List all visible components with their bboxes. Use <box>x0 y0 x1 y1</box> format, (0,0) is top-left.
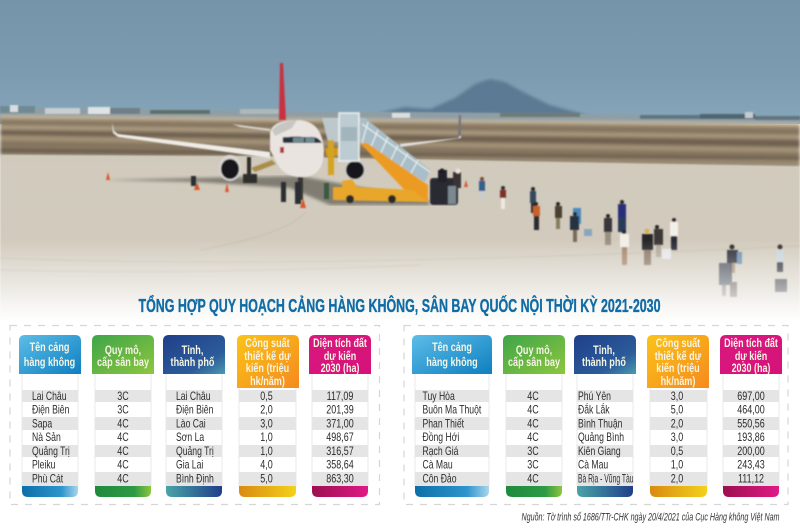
column: province: Tỉnh, <box>182 345 203 357</box>
column: airport name: hàng không <box>426 357 478 369</box>
column: land area: 117,09 <box>327 391 354 403</box>
glass rail <box>360 118 430 182</box>
column: capacity: 5,0 <box>260 474 273 486</box>
ground shadow <box>105 176 430 205</box>
column: capacity: hk/năm) <box>250 376 285 388</box>
distant town <box>0 105 800 122</box>
column: land area: 200,00 <box>737 446 765 458</box>
column: airport name: Pleiku <box>32 460 55 472</box>
column: airport name: Buôn Ma Thuột <box>422 405 481 417</box>
column: scale: 4C <box>117 419 129 431</box>
column: land area: 111,12 <box>738 474 764 486</box>
right engine <box>344 159 366 181</box>
column: land area: 550,56 <box>737 419 765 431</box>
column: airport name: Côn Đảo <box>422 473 457 486</box>
column: capacity: 3,0 <box>260 419 273 431</box>
column: province: Phú Yên <box>578 391 611 403</box>
column: airport name <box>412 335 492 497</box>
column: capacity: 4,0 <box>260 460 273 472</box>
fuselage <box>270 120 324 177</box>
column: land area: 243,43 <box>737 460 765 472</box>
right wing <box>400 135 461 147</box>
column: province: Bình Thuận <box>578 418 622 431</box>
column: capacity: thiết kế dự <box>655 350 702 363</box>
column: land area: Diện tích đất <box>724 337 778 350</box>
column: scale: 3C <box>117 391 129 403</box>
passengers walking across apron <box>479 177 787 297</box>
column: land area: 316,57 <box>326 446 354 458</box>
column: airport name: Nà Sản <box>32 432 61 445</box>
column: land area: 498,67 <box>326 432 354 445</box>
column: land area <box>720 335 782 497</box>
column: airport name: Tên cảng <box>30 342 69 354</box>
column: airport name: Lai Châu <box>32 391 66 403</box>
column: capacity: kiến (triệu <box>656 362 700 375</box>
column: scale: Quy mô, <box>516 345 552 357</box>
column: airport name: Điện Biên <box>32 405 69 417</box>
airplane <box>112 63 461 200</box>
column: scale: 3C <box>527 460 539 472</box>
column: land area: 371,00 <box>326 419 354 431</box>
column: capacity: 1,0 <box>671 460 683 472</box>
column: scale <box>92 335 154 497</box>
column: province: Quảng Trị <box>176 446 214 458</box>
panel: left table <box>10 326 380 504</box>
truck base <box>333 179 428 202</box>
passenger stairs truck <box>322 113 430 203</box>
column: scale: 4C <box>527 405 539 417</box>
column: province <box>163 335 225 497</box>
column: capacity: Công suất <box>656 337 701 350</box>
column: province: Kiên Giang <box>578 446 621 458</box>
column: province: Cà Mau <box>578 460 608 472</box>
column: scale: cấp sân bay <box>508 356 560 369</box>
column: airport name: Cà Mau <box>422 460 453 472</box>
column: land area: 2030 (ha) <box>321 363 359 375</box>
column: capacity: 1,0 <box>260 432 273 445</box>
column: capacity: 3,0 <box>671 432 683 445</box>
ground crew <box>191 176 329 204</box>
sky <box>0 0 800 124</box>
column: province <box>574 335 636 497</box>
column: capacity: kiến (triệu <box>246 362 289 375</box>
column: province: Quảng Bình <box>578 432 624 445</box>
column: capacity: Công suất <box>245 337 290 350</box>
fuselage logo mark <box>280 147 284 153</box>
column: land area: Diện tích đất <box>313 337 367 350</box>
column: province: Bình Định <box>176 473 214 486</box>
column: capacity: 0,5 <box>260 391 273 403</box>
tail fin <box>279 63 286 120</box>
column: airport name: Tên cảng <box>432 342 472 354</box>
column: land area <box>309 335 371 497</box>
cockpit windows <box>283 136 322 143</box>
column: province: Lào Cai <box>176 418 206 431</box>
column: capacity: 2,0 <box>671 419 683 431</box>
white fade <box>0 240 800 322</box>
column: scale: 4C <box>117 460 129 472</box>
column: capacity: 5,0 <box>671 405 683 417</box>
column: capacity: 1,0 <box>260 446 273 458</box>
column: scale: 4C <box>527 391 539 403</box>
left wing <box>112 122 270 158</box>
column: land area: dự kiến <box>735 350 767 363</box>
column: airport name: hàng không <box>24 357 75 369</box>
orange stair face <box>360 143 428 202</box>
column: airport name: Đồng Hới <box>422 431 459 445</box>
panel: right table <box>404 326 788 504</box>
passengers boarding group <box>430 168 461 205</box>
column: land area: 464,00 <box>737 405 765 417</box>
column: land area: 863,30 <box>326 474 354 486</box>
column: scale: Quy mô, <box>105 345 141 357</box>
column: province: Sơn La <box>176 432 204 445</box>
column: land area: 193,86 <box>737 432 765 445</box>
second stair behind <box>322 118 340 142</box>
column: airport name: Rạch Giá <box>422 446 459 458</box>
column: province: Tỉnh, <box>593 345 615 357</box>
column: scale: 4C <box>527 419 539 431</box>
column: land area: 697,00 <box>737 391 765 403</box>
column: land area: 201,39 <box>326 405 354 417</box>
column: province: Bà Rịa - Vũng Tàu <box>578 473 634 486</box>
column: airport name: Tuy Hòa <box>422 391 455 403</box>
column: capacity <box>647 335 709 497</box>
apron streaks <box>0 212 800 272</box>
airfield grass stripes <box>0 115 800 167</box>
column: province: thành phố <box>582 356 627 369</box>
distant mountain <box>375 79 590 116</box>
column: airport name: Phù Cát <box>32 473 63 486</box>
column: scale: 4C <box>117 446 129 458</box>
column: scale: 4C <box>527 474 539 486</box>
column: province: Lai Châu <box>176 391 210 403</box>
column: scale: 3C <box>527 446 539 458</box>
column: airport name <box>19 335 81 497</box>
column: capacity: 3,0 <box>671 391 683 403</box>
column: capacity: hk/năm) <box>661 376 695 388</box>
column: scale: 3C <box>117 405 129 417</box>
column: scale: 4C <box>527 432 539 445</box>
column: airport name: Sapa <box>32 418 52 431</box>
column: capacity: 2,0 <box>671 474 683 486</box>
traffic cones <box>106 172 468 208</box>
column: capacity: 0,5 <box>671 446 683 458</box>
column: province: Đắk Lắk <box>578 402 610 417</box>
column: capacity <box>237 335 299 497</box>
column: province: Gia Lai <box>176 460 203 472</box>
column: province: thành phố <box>171 356 215 369</box>
column: capacity: 2,0 <box>260 405 273 417</box>
column: scale: cấp sân bay <box>97 356 149 369</box>
column: province: Điện Biên <box>176 405 213 417</box>
column: land area: 358,64 <box>326 460 354 472</box>
column: scale: 4C <box>117 474 129 486</box>
column: capacity: thiết kế dự <box>244 350 291 363</box>
platform glass <box>339 113 359 161</box>
landing gear <box>243 157 257 183</box>
column: scale <box>503 335 565 497</box>
left engine <box>219 155 241 181</box>
column: land area: 2030 (ha) <box>732 363 770 375</box>
column: airport name: Quảng Trị <box>32 446 70 458</box>
apron concrete <box>0 155 800 330</box>
column: airport name: Phan Thiết <box>422 417 464 431</box>
column: land area: dự kiến <box>324 350 356 363</box>
column: scale: 4C <box>117 432 129 445</box>
